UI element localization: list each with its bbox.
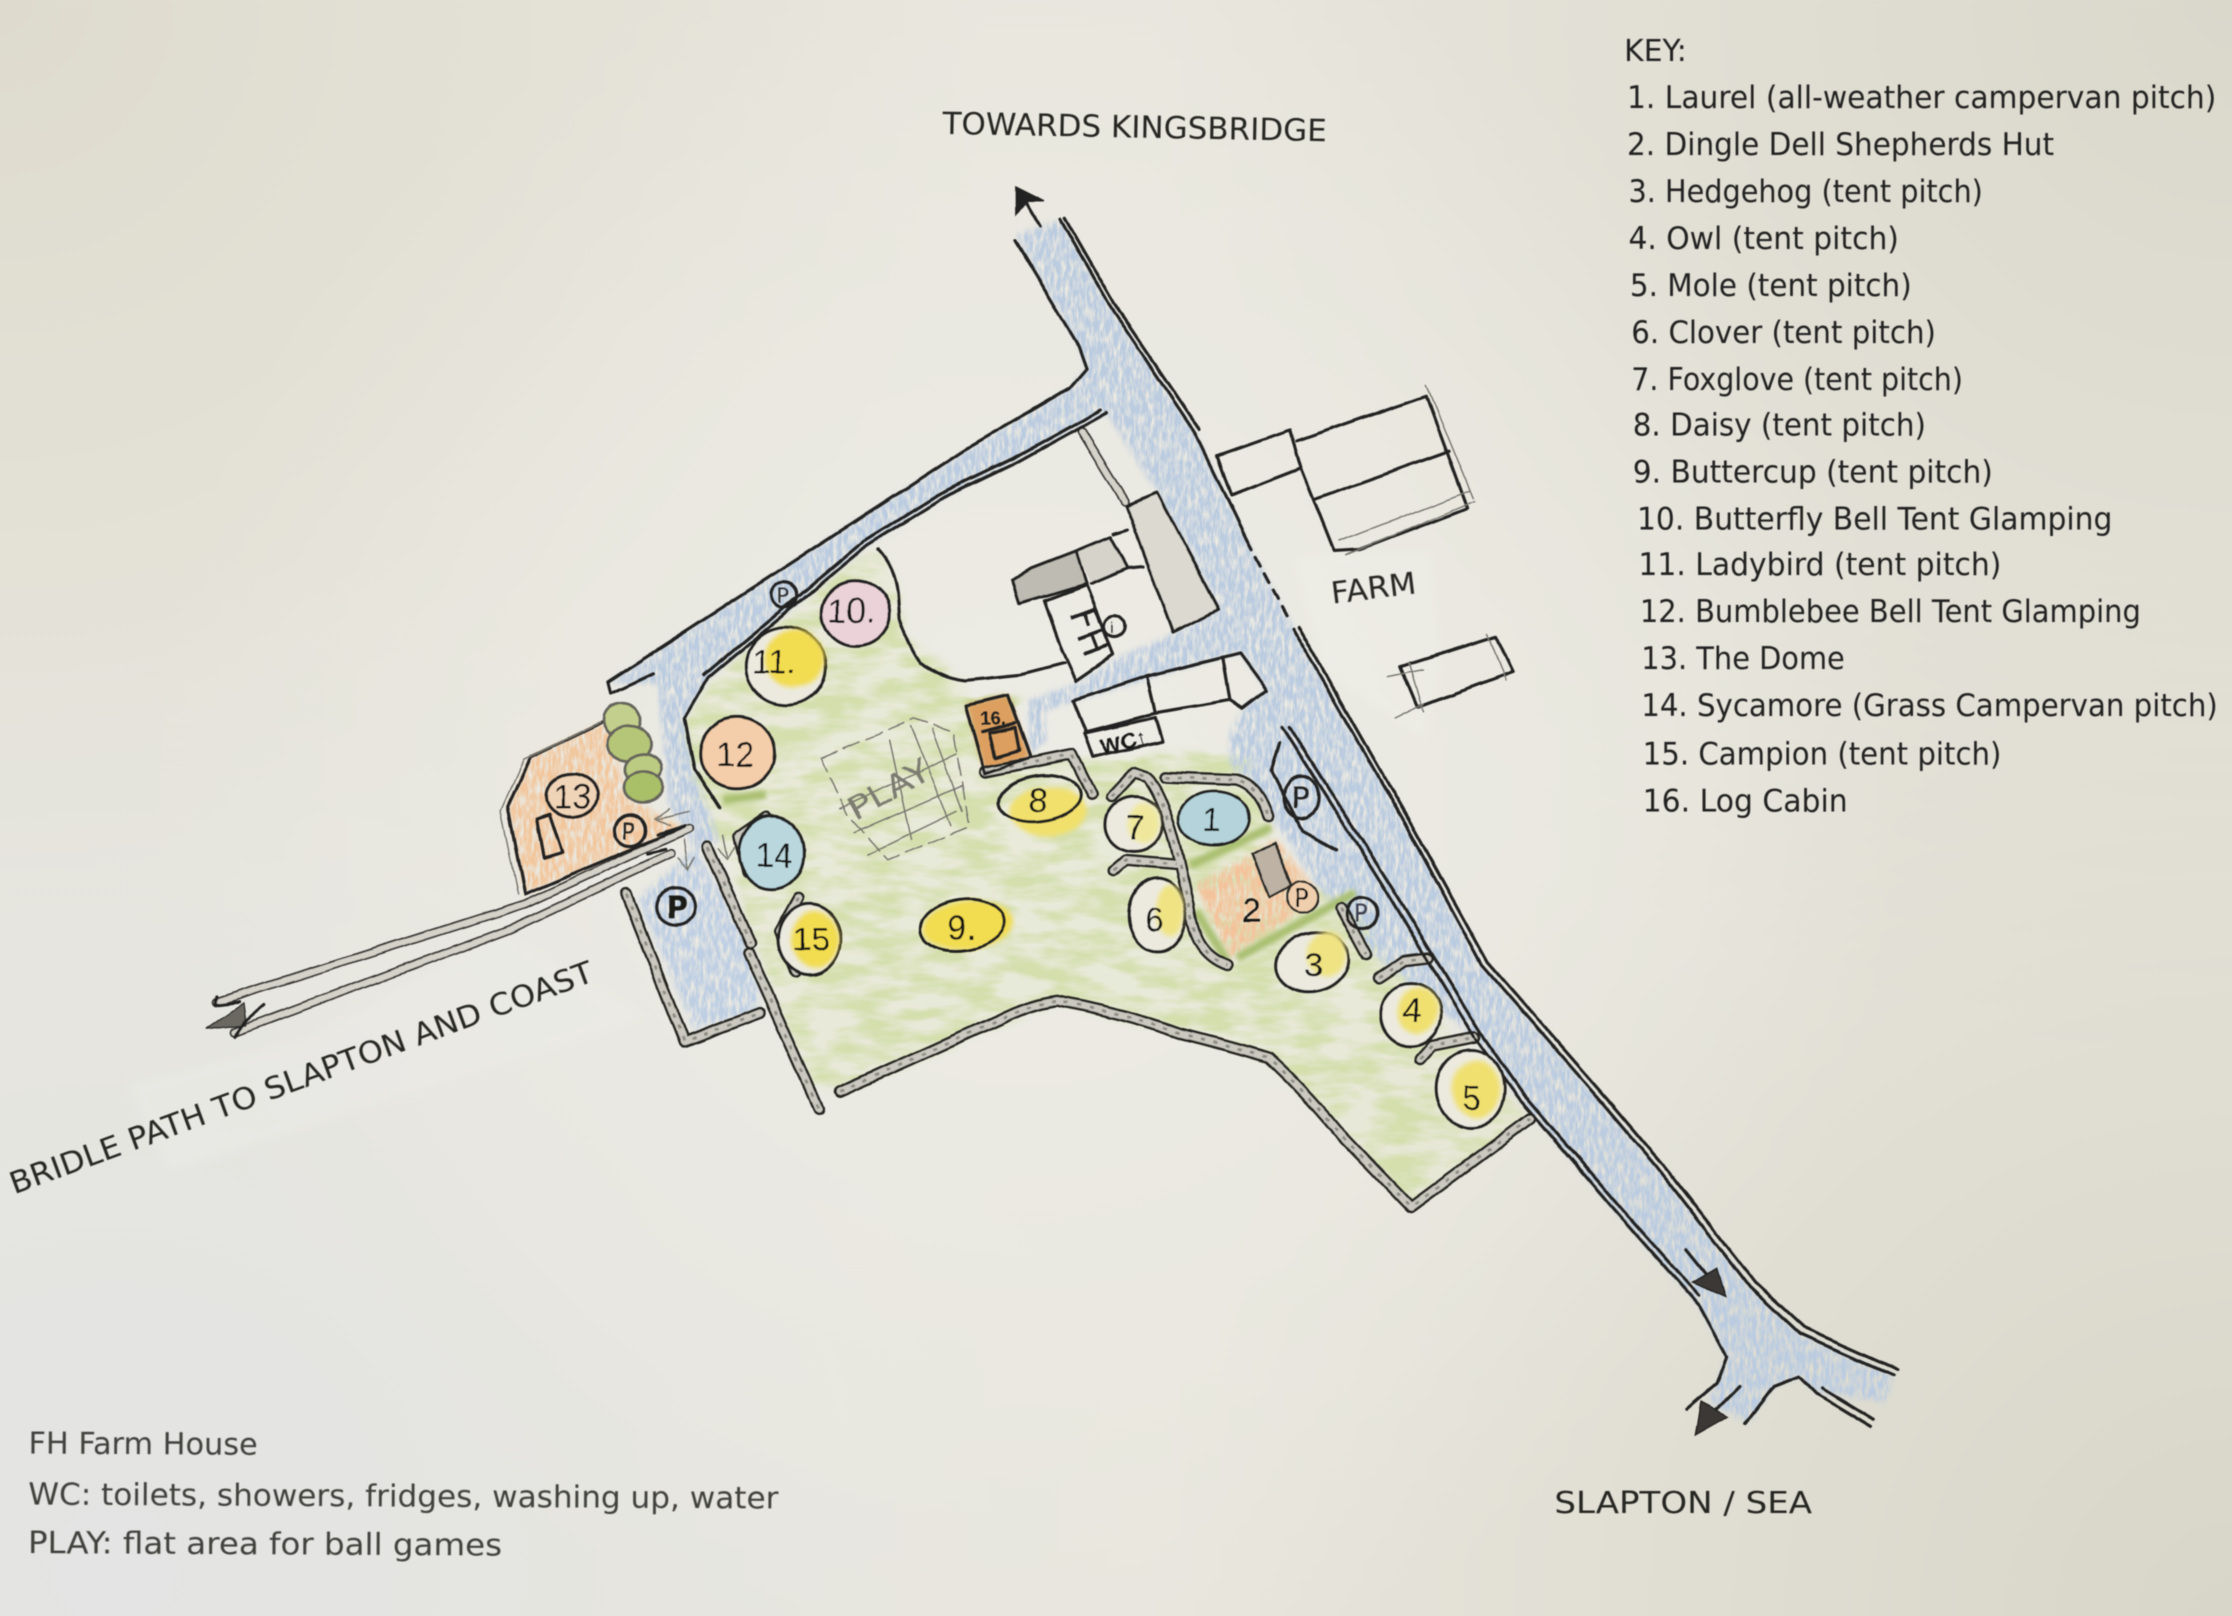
pitch 12 Bumblebee <box>700 717 774 789</box>
main road outlines <box>608 218 1897 1426</box>
pitch 6 Clover <box>1129 878 1186 952</box>
key: numbered pitch list: 13. The Dome <box>1641 641 1845 677</box>
pitch 5 Mole <box>1436 1051 1505 1127</box>
label: bridle path: BRIDLE PATH TO SLAPTON AND COAST <box>5 955 599 1202</box>
pitch 14 Sycamore: 14 <box>755 837 793 875</box>
arrow: bridle path <box>206 996 265 1036</box>
label: towards Kingsbridge: TOWARDS KINGSBRIDGE <box>941 107 1327 149</box>
log cabin shading <box>967 695 1031 773</box>
key: numbered pitch list: 4. Owl (tent pitch) <box>1628 221 1899 257</box>
parking bay shading <box>638 848 760 1031</box>
key: numbered pitch list: 15. Campion (tent pitch) <box>1643 736 2001 772</box>
P: road side: P <box>1291 782 1309 817</box>
arrow: towards sea <box>1695 1386 1739 1435</box>
P: hut: P <box>1294 884 1309 914</box>
pitch 7 Foxglove <box>1106 797 1163 851</box>
notes: abbreviations: WC: toilets, showers, fridges, washing up, water <box>28 1478 779 1517</box>
pitch 15 Campion: 15 <box>792 921 830 959</box>
P: bay: P <box>666 891 688 926</box>
key: numbered pitch list: 5. Mole (tent pitch) <box>1630 268 1912 304</box>
map: line work <box>206 187 1897 1435</box>
small farm building <box>1388 633 1513 719</box>
key: numbered pitch list: 1. Laurel (all-weather campervan pitch) <box>1627 80 2216 116</box>
P: upper road <box>772 582 797 610</box>
P: upper road: P <box>777 585 790 610</box>
P: hedgehog <box>1347 898 1378 930</box>
bridle path walls <box>216 431 1125 1032</box>
pitch 1 Laurel <box>1179 791 1250 846</box>
pitch 1 Laurel: 1 <box>1202 801 1221 839</box>
key: numbered pitch list: KEY: <box>1624 34 1687 69</box>
grass area shading <box>683 549 1530 1206</box>
dome area shading <box>508 720 683 894</box>
WC sign <box>1085 717 1163 759</box>
key: numbered pitch list: 16. Log Cabin <box>1643 783 1848 819</box>
key: numbered pitch list: 3. Hedgehog (tent pitch) <box>1628 174 1983 210</box>
farm house: i <box>1110 618 1115 637</box>
label: farm: FARM <box>1329 566 1418 612</box>
log cabin 16 <box>967 695 1031 773</box>
hut 2 block: 2 <box>1242 892 1261 930</box>
long barn <box>1126 493 1218 632</box>
farm house <box>1012 530 1143 680</box>
hedges <box>626 754 1530 1207</box>
key: numbered pitch list: 11. Ladybird (tent pitch) <box>1638 547 2001 583</box>
key: numbered pitch list: 12. Bumblebee Bell Tent Glamping <box>1640 594 2141 630</box>
pitch 11 Ladybird <box>746 628 826 705</box>
notes: abbreviations <box>28 1426 780 1565</box>
key: numbered pitch list: 9. Buttercup (tent pitch) <box>1633 455 1993 491</box>
pitch 15 Campion <box>779 904 841 975</box>
key: numbered pitch list: 2. Dingle Dell Shepherds Hut <box>1627 127 2054 163</box>
arrow: towards Slapton <box>1687 1250 1725 1297</box>
pitch 9 Buttercup: 9. <box>948 910 977 948</box>
trees <box>604 703 663 803</box>
pitch 3 Hedgehog: 3 <box>1304 947 1323 985</box>
hut 2 area shading <box>1196 838 1321 958</box>
hut 2 block <box>1242 843 1291 930</box>
key: numbered pitch list: 6. Clover (tent pitch) <box>1631 315 1936 351</box>
play area: PLAY <box>842 752 937 828</box>
P: dome <box>615 814 646 846</box>
pitch 4 Owl <box>1381 984 1441 1046</box>
pitch 3 Hedgehog <box>1269 924 1356 1000</box>
play area <box>821 719 969 860</box>
log cabin 16: 16. <box>981 708 1006 729</box>
P: hedgehog: P <box>1354 900 1368 928</box>
pitch 10 Butterfly: 10. <box>827 592 875 630</box>
parking markers <box>615 582 1378 930</box>
pitch 6 Clover: 6 <box>1145 901 1164 939</box>
farm barns <box>1217 384 1475 555</box>
key: numbered pitch list: 8. Daisy (tent pitch) <box>1633 408 1926 444</box>
key: numbered pitch list: 7. Foxglove (tent pitch) <box>1631 362 1963 398</box>
pitch 13 The Dome: 13 <box>553 779 591 817</box>
pitch 7 Foxglove: 7 <box>1126 808 1145 846</box>
pitch 8 Daisy: 8 <box>1028 781 1047 819</box>
pitch 8 Daisy <box>995 771 1086 836</box>
farm house: FH <box>1061 602 1118 662</box>
key: numbered pitch list: 10. Butterfly Bell Tent Glamping <box>1637 502 2112 538</box>
notes: abbreviations: FH Farm House <box>28 1426 258 1463</box>
pitch 11 Ladybird: 11. <box>752 643 797 681</box>
pitch 5 Mole: 5 <box>1462 1079 1481 1117</box>
WC sign: WC↑ <box>1099 725 1150 759</box>
pitch 4 Owl: 4 <box>1403 992 1422 1030</box>
green hedge shading <box>723 794 1355 961</box>
P: bay <box>656 888 696 926</box>
P: road side <box>1271 743 1337 850</box>
pitch 12 Bumblebee: 12 <box>716 736 754 774</box>
pitch 10 Butterfly <box>821 581 890 646</box>
place labels <box>5 107 1812 1521</box>
pitch 14 Sycamore <box>739 816 804 890</box>
road shading <box>608 221 1893 1424</box>
label: Slapton / Sea: SLAPTON / SEA <box>1554 1486 1812 1521</box>
P: dome: P <box>622 818 636 844</box>
key: numbered pitch list <box>1624 34 2218 819</box>
map: colour shading <box>508 221 1893 1424</box>
pitch 9 Buttercup <box>916 894 1016 957</box>
pitch 13 The Dome <box>547 774 598 817</box>
small access arrows <box>655 809 735 870</box>
The Dome area outline <box>501 720 683 894</box>
P: hut <box>1287 881 1318 914</box>
notes: abbreviations: PLAY: flat area for ball games <box>28 1526 502 1564</box>
arrow: towards Kingsbridge <box>1016 187 1045 226</box>
hedge line around play field <box>878 549 1065 680</box>
toilet and wash block <box>1073 653 1267 732</box>
grass base tint <box>683 549 1530 1206</box>
